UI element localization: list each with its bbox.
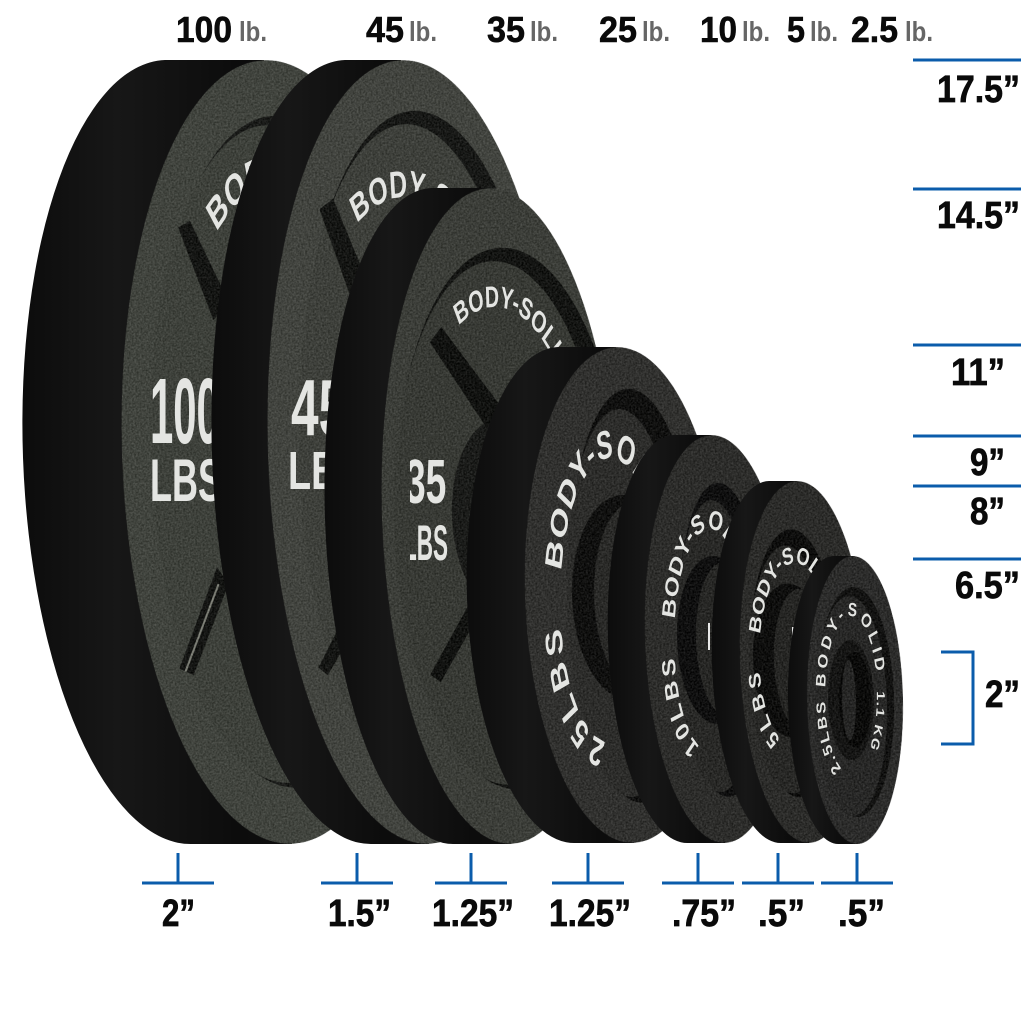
label: 25 lb: 25 [599, 9, 637, 50]
thickness: 35 lb plate: 1.25” [432, 893, 514, 935]
plate 35 lettering: LBS [403, 516, 448, 572]
thickness: 45 lb plate: 1.5” [328, 893, 391, 935]
thickness: 2.5 lb plate [821, 853, 893, 935]
label: 35 lb: 35 [487, 9, 525, 50]
plate 2.5 lettering [816, 602, 885, 775]
thickness scale [142, 853, 893, 935]
thickness: 100 lb plate [142, 853, 214, 935]
plate 2.5 lettering: 1.1 KG [871, 692, 885, 750]
label: 100 lb [176, 9, 267, 50]
plate: 10 lb [608, 435, 760, 843]
plate 25 rim [467, 347, 634, 843]
plate 45 rim [211, 60, 429, 844]
plate 5 lettering [748, 548, 818, 750]
label: 25 lb [599, 9, 670, 50]
plate 2.5 face [804, 555, 906, 845]
diameter: 9 in: 9” [970, 442, 1005, 484]
label: 45 lb: lb. [409, 16, 437, 47]
thickness: 45 lb plate [321, 853, 393, 935]
thickness: 2.5 lb plate: .5” [838, 893, 885, 935]
plate 10 hole gap [708, 623, 710, 650]
plate 10 face [638, 433, 798, 845]
label: 35 lb: lb. [530, 16, 558, 47]
diameter: 11 in [913, 345, 1021, 394]
label: 100 lb: lb. [239, 16, 267, 47]
plate 5 lettering: 5LBS [748, 673, 778, 750]
plate 10 lettering: BODY-SOLID [662, 511, 730, 618]
diameter: 17.5 in [913, 60, 1021, 111]
plate: 2.5 lb [788, 556, 904, 844]
thickness: 25 lb plate: 1.25” [549, 893, 631, 935]
plate: 45 lb [212, 60, 520, 844]
plate 45 face [254, 55, 576, 849]
plate 2.5 lettering: 2.5LBS [816, 702, 841, 775]
label: 2.5 lb: 2.5 [851, 9, 898, 50]
hole size bracket: 2 in: 2” [985, 674, 1020, 716]
thickness: 25 lb plate [549, 853, 631, 935]
label: 10 lb: 10 [700, 9, 737, 50]
diameter: 8 in: 8” [970, 491, 1005, 533]
weight labels [176, 9, 933, 50]
plate: 35 lb [324, 188, 596, 844]
label: 35 lb [487, 9, 558, 50]
plate 5 hole gap [792, 627, 794, 639]
plate 45 lettering: 45 [291, 364, 346, 453]
diameter: 11 in: 11” [951, 352, 1005, 394]
plate 100 lettering: BODY-SOLID [206, 160, 252, 230]
thickness: 100 lb plate: 2” [162, 893, 195, 935]
plate 45 lettering [288, 170, 448, 501]
plate 10 lettering [662, 511, 730, 757]
plate 35 lettering [410, 286, 562, 560]
plate 5 lettering: BODY-SOLID [748, 548, 818, 633]
plate 100 rim [22, 60, 292, 844]
plate 35 rim [324, 188, 512, 844]
label: 25 lb: lb. [642, 16, 670, 47]
plate 100 face [108, 55, 448, 849]
thickness: 10 lb plate: .75” [672, 893, 736, 935]
diameter: 6.5 in: 6.5” [955, 565, 1020, 607]
plate: 5 lb [712, 481, 851, 843]
plate 45 lettering: BODY-SOLID [349, 170, 448, 222]
label: 45 lb [366, 9, 437, 50]
diameter scale [913, 60, 1021, 744]
thickness: 35 lb plate [432, 853, 514, 935]
label: 5 lb [787, 9, 838, 50]
diameter: 9 in [913, 436, 1021, 484]
label: 5 lb: 5 [787, 9, 805, 50]
label: 2.5 lb [851, 9, 933, 50]
plate 100 lettering: 100 [150, 360, 220, 464]
thickness: 5 lb plate [742, 853, 814, 935]
diameter: 14.5 in [913, 189, 1021, 237]
plate: 25 lb [466, 347, 697, 843]
plate 45 lettering: LBS [288, 440, 364, 501]
plate 35 lettering: 35 [405, 447, 446, 516]
plate 5 rim [712, 481, 809, 843]
plate 25 lettering [545, 430, 644, 766]
diameter: 8 in [913, 486, 1021, 533]
diameter: 14.5 in: 14.5” [937, 195, 1020, 237]
plate: 100 lb [22, 60, 331, 844]
label: 10 lb [700, 9, 770, 50]
label: 5 lb: lb. [810, 16, 838, 47]
plate 35 lettering: BODY-SOLID [452, 286, 562, 349]
thickness: 10 lb plate [662, 853, 736, 935]
plate 10 rim [608, 435, 725, 843]
plate 2.5 rim [788, 556, 858, 844]
plate 25 face [516, 344, 734, 846]
plate 10 lettering: 10LBS [662, 659, 698, 757]
hole size bracket: 2 in [941, 652, 1020, 744]
plate 25 lettering: BODY-SOLID [545, 430, 644, 569]
plate 100 lettering [150, 160, 252, 514]
plate 100 lettering: LBS [150, 448, 222, 514]
diameter: 6.5 in [913, 559, 1021, 607]
diameter: 17.5 in: 17.5” [937, 69, 1020, 111]
plate 5 face [734, 479, 872, 845]
thickness: 5 lb plate: .5” [758, 893, 805, 935]
plate 35 face [371, 184, 636, 848]
label: 100 lb: 100 [176, 9, 232, 50]
label: 2.5 lb: lb. [905, 16, 933, 47]
plate 25 lettering: 25LBS [546, 630, 605, 766]
plate 2.5 lettering: BODY-SOLID [816, 602, 884, 686]
label: 10 lb: lb. [742, 16, 770, 47]
label: 45 lb: 45 [366, 9, 404, 50]
